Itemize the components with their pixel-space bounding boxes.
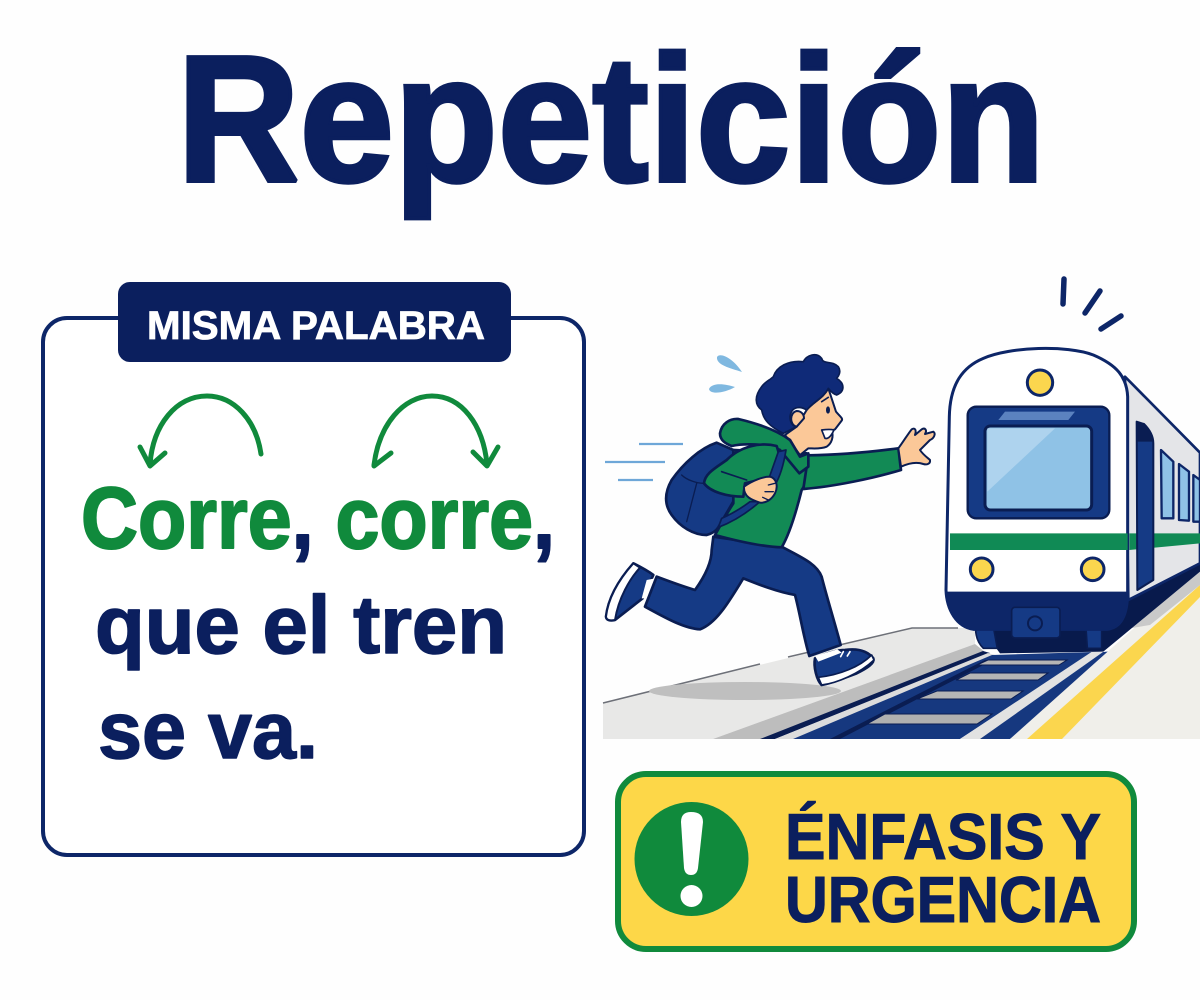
back shoe [606,563,655,620]
arrow: second repetition arc [374,396,498,466]
backpack strap [718,450,786,527]
platform shadow [649,682,841,700]
train windshield [968,407,1109,518]
front shoe [815,649,874,685]
forward hand [898,429,935,467]
text: énfasis y urgencia: ÉNFASIS Y [785,800,1101,873]
runner [606,355,935,685]
panel: misma palabra [43,282,584,855]
platform: left [603,628,975,739]
trousers [645,537,841,656]
back sleeve [704,444,780,497]
text: corre, corre: Corre, corre, [81,470,555,567]
icon: exclamation [634,802,748,916]
ear [791,411,804,427]
icon: train alert lines [1063,279,1121,329]
text: énfasis y urgencia [785,800,1101,936]
track [713,644,1125,739]
train coupler [1012,607,1060,638]
illustration: station scene [603,279,1200,739]
hair [756,355,843,433]
hoodie body [715,450,808,547]
hood [720,419,808,473]
text: se va: se va. [98,686,318,776]
train wheels [976,627,997,648]
train lights [1027,370,1053,395]
train [946,348,1200,653]
train side [1125,377,1200,600]
text: que el tren: que el tren [95,580,507,671]
speed lines [605,444,683,480]
title: Repetición [177,19,1045,220]
icon: sweat drops [709,355,742,393]
train front [946,348,1128,629]
train undercarriage [973,563,1200,653]
badge: misma palabra: MISMA PALABRA [147,304,485,348]
callout: énfasis y urgencia [618,774,1134,949]
platform: right with yellow line [1010,572,1200,739]
arrow: first repetition arc [140,396,261,466]
badge: misma palabra [118,282,511,362]
text: énfasis y urgencia: URGENCIA [785,863,1101,936]
backpack [666,443,740,535]
back hand [744,477,777,503]
face [785,388,842,455]
forward arm [803,448,901,489]
